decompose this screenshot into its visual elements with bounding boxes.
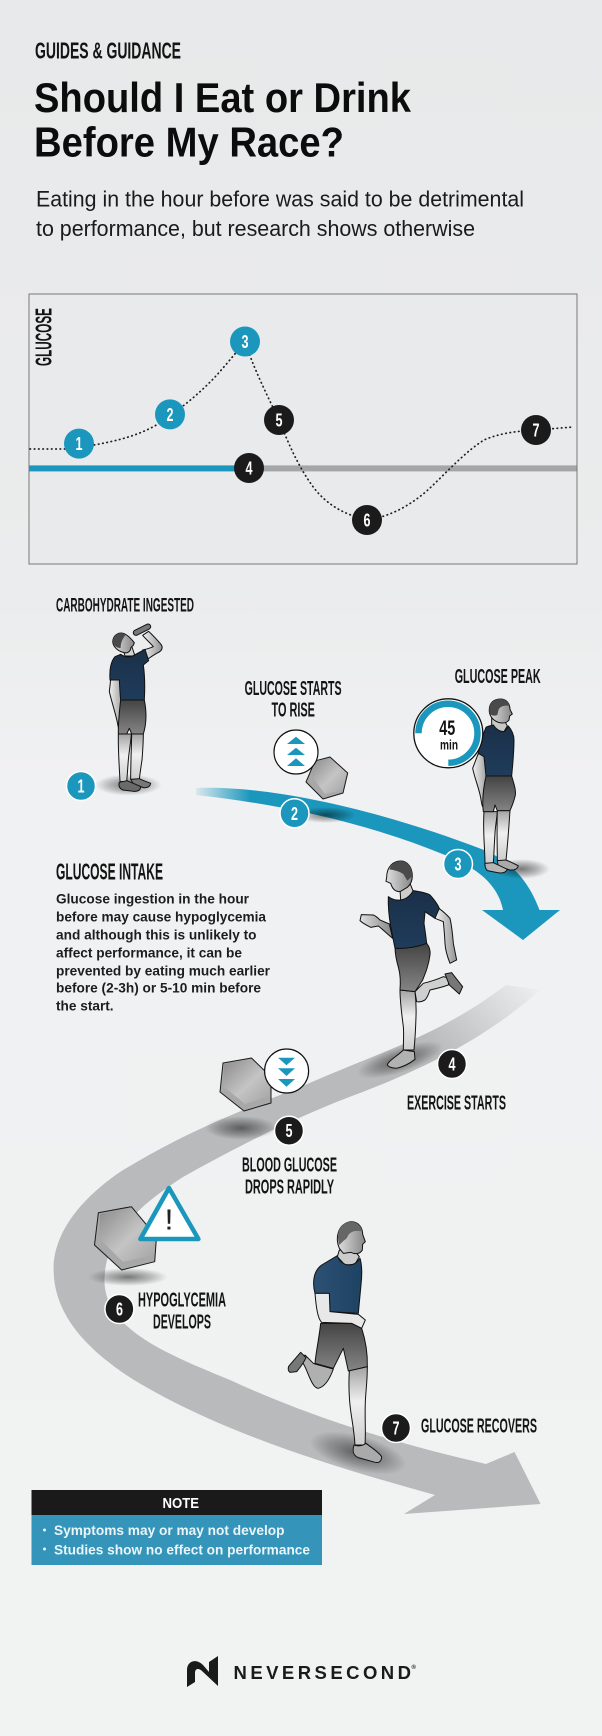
athlete starting to run: [360, 861, 463, 1068]
chart marker 5: 5: [276, 410, 282, 430]
logo: neversecond: [187, 1656, 416, 1687]
registered mark: ®: [412, 1664, 416, 1671]
step badge 2: [280, 799, 309, 828]
chart marker 4: [234, 453, 264, 483]
athlete standing at glucose peak: [473, 699, 550, 879]
subtitle: [36, 186, 524, 241]
timer: 45 min: [414, 699, 483, 768]
shadow under recovering athlete: [305, 1423, 411, 1483]
athlete drinking: [95, 627, 162, 796]
panel: glucose chart: [29, 294, 577, 564]
eyebrow heading: GUIDES & GUIDANCE: [35, 38, 181, 64]
step badge 4: 4: [448, 1054, 456, 1074]
dotted glucose curve: [30, 342, 573, 520]
chart marker 5: [264, 405, 294, 435]
chart marker 3: [230, 326, 260, 356]
step badge 3: [444, 850, 472, 878]
axis label: glucose: GLUCOSE: [30, 308, 56, 366]
text block: glucose intake: and although this is unlikely to: [56, 927, 256, 942]
icon: falling arrows: [265, 1049, 309, 1093]
panel: note: [32, 1490, 322, 1565]
label: glucose starts to rise: [245, 678, 342, 722]
text block: glucose intake: the start.: [56, 999, 114, 1014]
chart marker 6: [352, 505, 382, 535]
label: exercise starts: EXERCISE STARTS: [407, 1092, 506, 1114]
chart marker 3: 3: [242, 332, 248, 352]
title: [34, 74, 412, 166]
step badge 5: [274, 1116, 304, 1145]
glucose hexagon dropping: [205, 1058, 277, 1140]
chart marker 1: 1: [76, 434, 82, 454]
step badge 6: [105, 1294, 134, 1324]
teal rising arrow path: [196, 788, 560, 940]
logo wordmark: NEVERSECOND: [234, 1662, 411, 1683]
note header bar: [32, 1490, 322, 1515]
icon: warning triangle: !: [164, 1204, 174, 1236]
text block: glucose intake: [56, 858, 271, 1014]
text block: glucose intake: affect performance, it can be: [56, 945, 242, 960]
step badge 7: 7: [392, 1418, 400, 1438]
step badge 6: 6: [116, 1300, 123, 1320]
text block: glucose intake: before (2-3h) or 5-10 min before: [56, 981, 261, 996]
chart marker 7: 7: [532, 420, 540, 440]
label: hypoglycemia develops: [138, 1290, 226, 1333]
subtitle: to performance, but research shows otherwise: [36, 216, 475, 241]
chart marker 2: 2: [166, 405, 174, 425]
timer: 45 min: min: [440, 736, 458, 752]
title: Before My Race?: [34, 118, 344, 166]
label: blood glucose drops rapidly: [242, 1155, 337, 1198]
step badge 4: [438, 1050, 466, 1078]
step badge 1: 1: [78, 776, 84, 796]
step badge 3: 3: [454, 854, 462, 874]
label: glucose starts to rise: GLUCOSE STARTS: [245, 678, 342, 700]
label: hypoglycemia develops: DEVELOPS: [153, 1311, 211, 1333]
step badge 2: 2: [291, 804, 298, 824]
note body: [32, 1515, 322, 1565]
chart marker 1: [64, 429, 94, 459]
icon: warning triangle: [140, 1188, 198, 1239]
note bullets: [43, 1522, 310, 1558]
title: Should I Eat or Drink: [34, 74, 412, 121]
text block: glucose intake: before may cause hypoglycemia: [56, 909, 266, 924]
shadow under exercising athlete: [353, 1034, 447, 1086]
text block: glucose intake: GLUCOSE INTAKE: [56, 858, 163, 884]
icon: rising arrows: [274, 730, 318, 774]
label: blood glucose drops rapidly: DROPS RAPIDLY: [245, 1176, 334, 1198]
athlete running recovered: [288, 1222, 382, 1463]
baseline: teal before exercise: [30, 465, 234, 471]
chart marker 2: [155, 399, 185, 429]
note heading: NOTE: [162, 1496, 199, 1512]
glucose hexagon low: [88, 1207, 168, 1286]
label: glucose starts to rise: TO RISE: [272, 700, 315, 722]
text block: glucose intake: Glucose ingestion in the hour: [56, 891, 250, 906]
step badge 7: [382, 1414, 410, 1442]
step badge 5: 5: [286, 1121, 292, 1141]
chart marker 7: [521, 415, 551, 445]
grey falling arrow path: [54, 985, 541, 1514]
text block: glucose intake: prevented by eating much earlier: [56, 963, 271, 978]
label: hypoglycemia develops: HYPOGLYCEMIA: [138, 1290, 226, 1312]
chart marker 4: 4: [246, 458, 252, 478]
subtitle: Eating in the hour before was said to be detrimental: [36, 186, 524, 212]
step badge 1: [66, 772, 96, 800]
note bullets: Symptoms may or may not develop: [54, 1522, 284, 1538]
chart marker 6: 6: [364, 510, 370, 530]
label: blood glucose drops rapidly: BLOOD GLUCOSE: [242, 1155, 337, 1177]
timer: 45 min: 45: [439, 717, 456, 740]
logo mark: [187, 1656, 218, 1687]
baseline: grey after exercise: [262, 465, 576, 471]
glucose hexagon rising: [296, 757, 356, 823]
label: carbohydrate ingested: CARBOHYDRATE INGESTED: [56, 596, 194, 617]
note bullets: Studies show no effect on performance: [54, 1542, 310, 1558]
